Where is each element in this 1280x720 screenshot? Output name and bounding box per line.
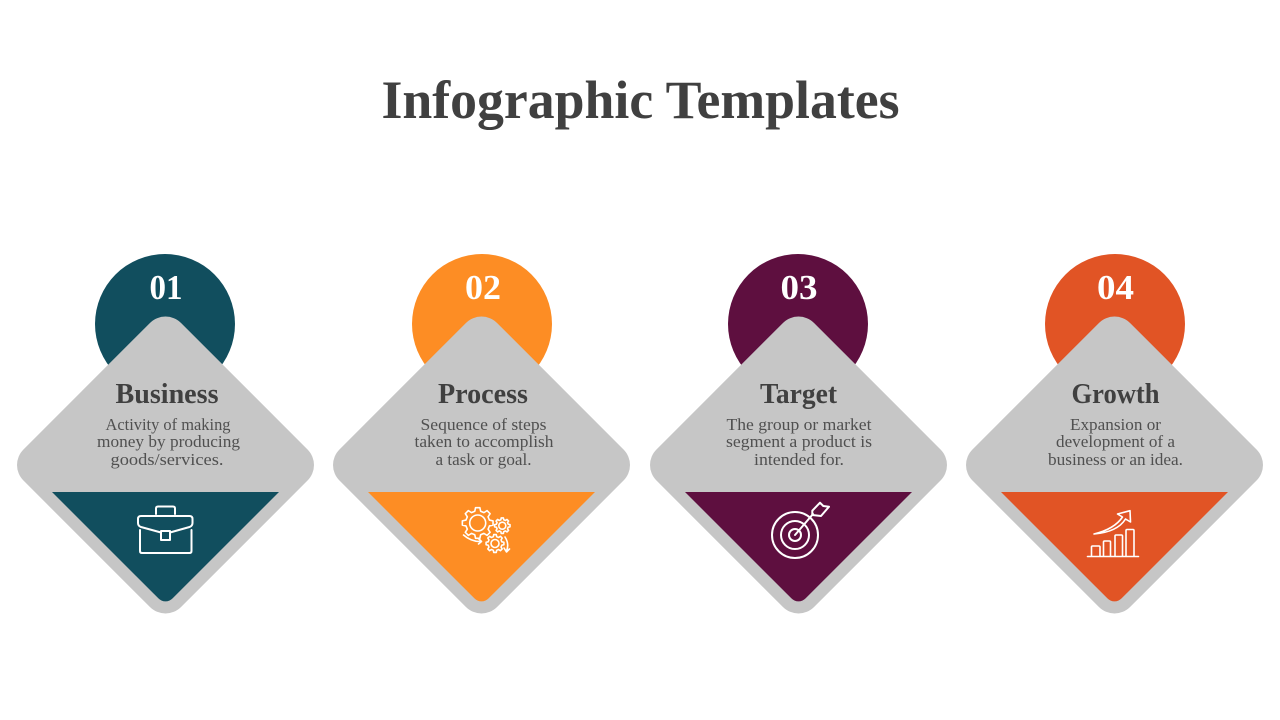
icon: target with arrow (772, 503, 829, 558)
heading: Growth (1072, 379, 1160, 410)
icon: growth chart (1088, 511, 1138, 556)
number circle 03 (728, 254, 868, 394)
description (414, 415, 554, 469)
description: Expansion or (1070, 415, 1161, 434)
description: money by producing (97, 432, 241, 451)
description: Sequence of steps (420, 415, 546, 434)
heading: Target (760, 379, 838, 410)
coloured triangle (1001, 492, 1228, 601)
description: a task or goal. (436, 450, 532, 469)
coloured triangle (685, 492, 912, 601)
grey diamond (650, 317, 947, 613)
description: development of a (1056, 432, 1175, 451)
number circle 02 (412, 254, 552, 394)
coloured triangle (368, 492, 595, 601)
number 01: 01 (150, 268, 182, 307)
description (726, 415, 872, 469)
description: segment a product is (726, 432, 872, 451)
description: business or an idea. (1048, 450, 1183, 469)
description: goods/services. (110, 450, 224, 469)
number circle 01 (95, 254, 235, 394)
icon: gears (462, 508, 510, 552)
heading: Business (115, 379, 219, 410)
description (1048, 415, 1183, 469)
grey diamond (966, 317, 1263, 613)
number 03: 03 (780, 268, 818, 307)
description (97, 415, 241, 469)
panel: 02 Process (333, 254, 630, 613)
number 04: 04 (1097, 268, 1134, 307)
description: intended for. (754, 450, 844, 469)
panel: 04 Growth (966, 254, 1263, 613)
description: The group or market (726, 415, 872, 434)
icon: briefcase (138, 506, 192, 553)
coloured triangle (52, 492, 279, 601)
grey diamond (333, 317, 630, 613)
description: Activity of making (106, 415, 231, 434)
heading: Process (438, 379, 528, 410)
title: Infographic Templates (382, 70, 900, 130)
number circle 04 (1045, 254, 1185, 394)
grey diamond (17, 317, 314, 613)
panel: 01 Business (17, 254, 314, 613)
panel: 03 Target (650, 254, 947, 613)
number 02: 02 (465, 268, 501, 307)
description: taken to accomplish (414, 432, 554, 451)
